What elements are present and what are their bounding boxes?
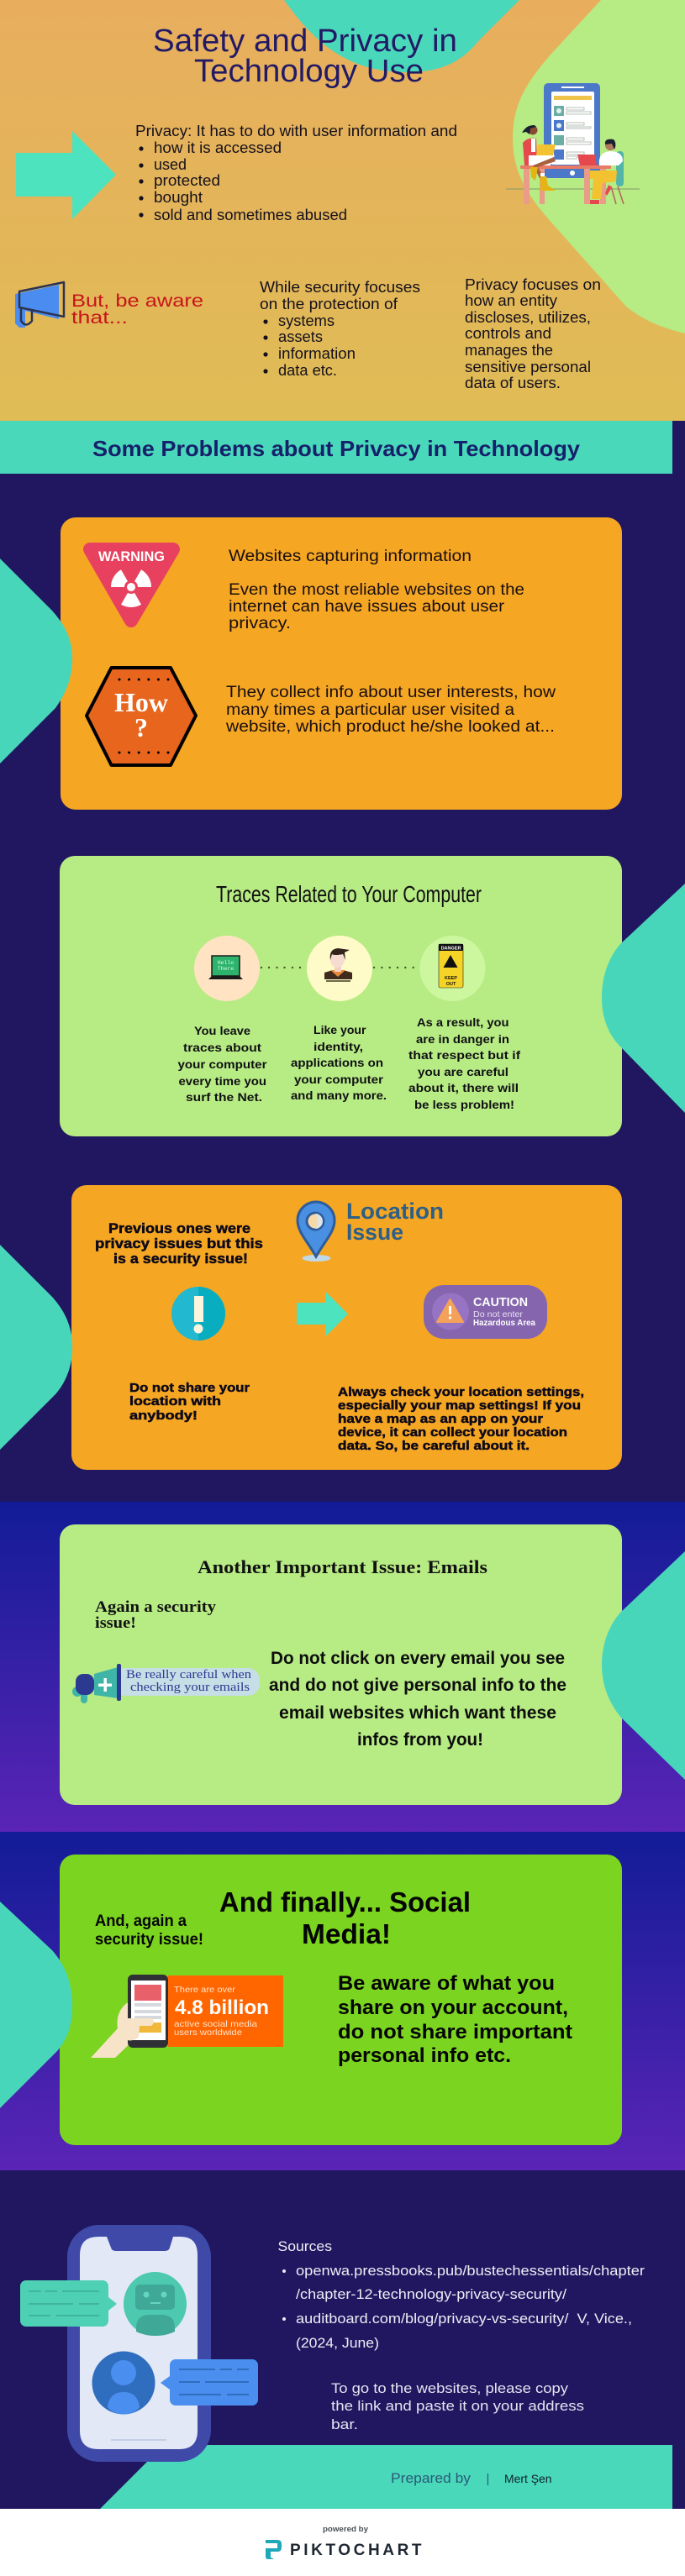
text: you leave traces: surf the Net. bbox=[186, 1090, 262, 1104]
illustration: people at phone table bbox=[506, 83, 640, 204]
text: as a result bbox=[408, 1015, 520, 1111]
footer: piktochart brand bbox=[266, 2525, 422, 2559]
text block: privacy definition: how it is accessed bbox=[154, 139, 282, 156]
icon: laptop circle bbox=[194, 936, 260, 1001]
text: like your identity: Like your bbox=[314, 1023, 366, 1036]
heading: location issue: Location bbox=[346, 1199, 444, 1224]
illustration: phone chat bbox=[20, 2225, 258, 2462]
connector dots 2 bbox=[373, 967, 422, 968]
text: prepared by: | bbox=[486, 2472, 489, 2486]
icon: warning triangle: WARNING bbox=[98, 548, 165, 564]
teal blob top bbox=[284, 0, 519, 72]
text: websites capturing: internet can have issues about user bbox=[229, 598, 505, 616]
text: you leave traces: your computer bbox=[178, 1057, 267, 1071]
graphic: 4.8 billion stat bbox=[91, 1975, 283, 2058]
text: as a result: about it, there will bbox=[408, 1081, 519, 1094]
badge: caution: CAUTION bbox=[473, 1295, 528, 1309]
text block: privacy definition: Privacy: It has to do with user information and bbox=[135, 123, 457, 139]
icon: danger sign circle bbox=[420, 936, 486, 1001]
callout: but be aware: that... bbox=[71, 308, 128, 328]
text: and again a security issue bbox=[95, 1912, 203, 1949]
text: prepared by: Prepared by bbox=[391, 2471, 472, 2486]
text block: privacy definition: sold and sometimes abused bbox=[154, 207, 347, 223]
text: as a result: are in danger in bbox=[416, 1032, 509, 1046]
text: do not click: and do not give personal info to the bbox=[269, 1676, 566, 1695]
text: as a result: that respect but if bbox=[408, 1048, 520, 1062]
text block: security focus: systems bbox=[278, 312, 335, 329]
header band bbox=[0, 421, 672, 474]
text: you leave traces bbox=[178, 1024, 267, 1104]
text block: privacy focus: Privacy focuses on bbox=[465, 276, 601, 293]
text block: privacy definition: used bbox=[154, 156, 187, 173]
section background: white footer bbox=[0, 2509, 685, 2576]
text block: privacy focus: discloses, utilizes, bbox=[465, 309, 591, 326]
text: as a result: be less problem! bbox=[414, 1098, 514, 1111]
heading: some problems: Some Problems about Privacy in Technology bbox=[92, 436, 581, 461]
panel: social media bbox=[60, 1855, 622, 2145]
text: do not click: Do not click on every email you see bbox=[271, 1649, 565, 1668]
text block: security focus: assets bbox=[278, 328, 323, 345]
panel: location issue bbox=[71, 1185, 622, 1470]
teal blob left 3 bbox=[0, 1902, 72, 2108]
text: be aware bbox=[338, 1972, 572, 2067]
icon: megaphone banner: checking your emails bbox=[130, 1681, 250, 1694]
icon: danger sign circle: KEEP bbox=[445, 976, 457, 981]
icon: warning triangle bbox=[90, 548, 173, 621]
text block: sources: openwa.pressbooks.pub/bustechessentials/chapter bbox=[296, 2264, 645, 2279]
text: do not click bbox=[269, 1649, 566, 1750]
teal blob left 2 bbox=[0, 1245, 72, 1450]
text block: security focus: on the protection of bbox=[260, 296, 398, 312]
icon: how hexagon bbox=[87, 668, 196, 765]
text: like your identity: and many more. bbox=[291, 1089, 387, 1102]
icon: laptop circle: Hello bbox=[218, 960, 234, 966]
text block: copy the link: the link and paste it on your address bbox=[331, 2399, 584, 2414]
section background: navy bbox=[0, 421, 685, 1503]
text: previous ones: Previous ones were bbox=[108, 1220, 250, 1236]
heading: traces: Traces Related to Your Computer bbox=[216, 881, 482, 907]
callout: but be aware bbox=[71, 291, 203, 328]
title: Technology Use bbox=[194, 54, 424, 89]
text block: sources: Sources bbox=[277, 2239, 332, 2254]
section background: intro bbox=[0, 0, 685, 422]
heading: location issue bbox=[346, 1199, 444, 1245]
text: again a security issue: Again a security bbox=[95, 1598, 217, 1616]
footer: piktochart brand: powered by bbox=[323, 2525, 369, 2534]
text: prepared by: Mert Şen bbox=[504, 2472, 551, 2485]
text: websites capturing: privacy. bbox=[229, 615, 291, 632]
text block: privacy focus: sensitive personal bbox=[465, 359, 591, 375]
green blob right bbox=[513, 0, 685, 333]
text: websites capturing: Websites capturing information bbox=[229, 548, 472, 565]
footer teal band bbox=[100, 2445, 672, 2509]
arrow: small teal bbox=[297, 1292, 348, 1335]
heading: location issue: Issue bbox=[346, 1220, 403, 1245]
text: you leave traces: every time you bbox=[178, 1074, 266, 1088]
text: be aware: personal info etc. bbox=[338, 2044, 511, 2067]
connector dots 1 bbox=[261, 967, 308, 968]
title bbox=[153, 24, 457, 89]
text: they collect info: They collect info about user interests, how bbox=[226, 684, 556, 701]
text block: copy the link: To go to the websites, please copy bbox=[331, 2381, 569, 2396]
text block: copy the link bbox=[331, 2381, 584, 2432]
text: you leave traces: traces about bbox=[183, 1041, 261, 1054]
teal blob right 1 bbox=[602, 884, 685, 1113]
text: like your identity: your computer bbox=[294, 1073, 384, 1086]
text: do not click: infos from you! bbox=[357, 1730, 483, 1750]
icon: megaphone banner bbox=[72, 1664, 260, 1703]
text: websites capturing: Even the most reliable websites on the bbox=[229, 581, 524, 599]
text: websites capturing bbox=[229, 548, 524, 632]
text block: privacy definition: bought bbox=[154, 189, 203, 206]
text: be aware: Be aware of what you bbox=[338, 1972, 555, 1995]
text block: security focus: While security focuses bbox=[260, 279, 420, 296]
text: they collect info: website, which product he/she looked at... bbox=[225, 718, 555, 736]
section background: email gradient bbox=[0, 1502, 685, 1832]
section background: social media gradient bbox=[0, 1832, 685, 2170]
text: they collect info bbox=[225, 684, 556, 736]
icon: how hexagon: How bbox=[114, 687, 168, 717]
badge: caution: Hazardous Area bbox=[473, 1319, 535, 1328]
arrow: teal right bbox=[16, 131, 116, 219]
text block: privacy focus: manages the bbox=[465, 342, 553, 359]
panel: traces related to your computer bbox=[60, 856, 622, 1136]
text block: sources: (2024, June) bbox=[296, 2336, 379, 2351]
heading: emails: Another Important Issue: Emails bbox=[198, 1556, 487, 1577]
title: Safety and Privacy in bbox=[153, 24, 457, 59]
text: do not share: anybody! bbox=[129, 1409, 198, 1423]
panel: websites capturing information bbox=[61, 517, 622, 810]
icon: how hexagon: ? bbox=[134, 712, 148, 742]
graphic: 4.8 billion stat: active social media bbox=[174, 2019, 257, 2029]
graphic: 4.8 billion stat: There are over bbox=[174, 1985, 236, 1995]
text: like your identity bbox=[291, 1023, 387, 1102]
text: prepared by bbox=[391, 2471, 551, 2486]
graphic: 4.8 billion stat: 4.8 billion bbox=[175, 1996, 269, 2019]
text block: security focus bbox=[260, 279, 420, 379]
icon: exclamation circle bbox=[171, 1287, 225, 1340]
text: always check: have a map as an app on your bbox=[338, 1412, 543, 1426]
text: do not share bbox=[129, 1381, 250, 1423]
icon: map pin bbox=[298, 1202, 335, 1262]
text: as a result: As a result, you bbox=[417, 1015, 509, 1029]
section background: footer navy bbox=[0, 2170, 685, 2509]
text: previous ones: privacy issues but this bbox=[95, 1236, 263, 1251]
badge: caution bbox=[424, 1285, 547, 1339]
text block: sources: /chapter-12-technology-privacy-security/ bbox=[296, 2287, 566, 2302]
text: again a security issue: issue! bbox=[95, 1614, 136, 1632]
footer: piktochart brand: PIKTOCHART bbox=[290, 2542, 422, 2559]
panel: emails bbox=[60, 1524, 622, 1805]
callout: but be aware: But, be aware bbox=[71, 291, 203, 311]
text: always check: device, it can collect your location bbox=[338, 1425, 567, 1440]
icon: megaphone banner: Be really careful when bbox=[126, 1668, 252, 1681]
text: and again a security issue: And, again a bbox=[95, 1912, 187, 1930]
text: you leave traces: You leave bbox=[194, 1024, 250, 1037]
text: do not share: location with bbox=[129, 1394, 221, 1409]
text block: security focus: information bbox=[278, 345, 356, 362]
text block: privacy definition: protected bbox=[154, 172, 220, 189]
text block: security focus: data etc. bbox=[278, 362, 337, 379]
text block: privacy definition bbox=[135, 123, 457, 223]
teal blob left 1 bbox=[0, 559, 72, 763]
text: always check bbox=[338, 1385, 584, 1453]
icon: piktochart logo bbox=[266, 2540, 282, 2559]
text block: privacy focus: data of users. bbox=[465, 375, 561, 391]
badge: caution: Do not enter bbox=[473, 1310, 524, 1319]
text: previous ones: is a security issue! bbox=[113, 1251, 248, 1267]
icon: megaphone bbox=[15, 282, 64, 328]
teal blob right 2 bbox=[602, 1551, 685, 1780]
text block: privacy focus: controls and bbox=[465, 325, 551, 342]
icon: person circle bbox=[307, 936, 372, 1001]
text: again a security issue bbox=[95, 1598, 217, 1632]
text: like your identity: applications on bbox=[291, 1056, 383, 1069]
heading: and finally bbox=[219, 1886, 471, 1949]
text: and again a security issue: security issue! bbox=[95, 1931, 203, 1949]
text: as a result: you are careful bbox=[418, 1065, 508, 1078]
graphic: 4.8 billion stat: users worldwide bbox=[174, 2028, 242, 2038]
text: always check: data. So, be careful about it. bbox=[338, 1439, 530, 1453]
text: like your identity: identity, bbox=[314, 1040, 363, 1053]
text block: privacy focus bbox=[465, 276, 601, 391]
icon: laptop circle: There bbox=[218, 966, 234, 972]
text block: sources: auditboard.com/blog/privacy-vs-security/ V, Vice., bbox=[296, 2311, 632, 2327]
text: be aware: do not share important bbox=[338, 2021, 572, 2043]
icon: danger sign circle: OUT bbox=[446, 982, 456, 987]
text block: sources bbox=[277, 2239, 645, 2351]
text: do not share: Do not share your bbox=[129, 1381, 250, 1395]
heading: and finally: And finally... Social bbox=[219, 1886, 471, 1918]
text block: privacy focus: how an entity bbox=[465, 292, 557, 309]
text block: copy the link: bar. bbox=[331, 2417, 358, 2432]
text: previous ones bbox=[95, 1220, 263, 1267]
icon: danger sign circle: DANGER bbox=[441, 946, 461, 951]
text: do not click: email websites which want these bbox=[279, 1703, 556, 1723]
text: always check: especially your map settings! If you bbox=[338, 1398, 581, 1413]
text: they collect info: many times a particular user visited a bbox=[226, 701, 514, 719]
text: be aware: share on your account, bbox=[338, 1996, 568, 2019]
text: always check: Always check your location settings, bbox=[338, 1385, 584, 1399]
heading: and finally: Media! bbox=[302, 1918, 391, 1949]
